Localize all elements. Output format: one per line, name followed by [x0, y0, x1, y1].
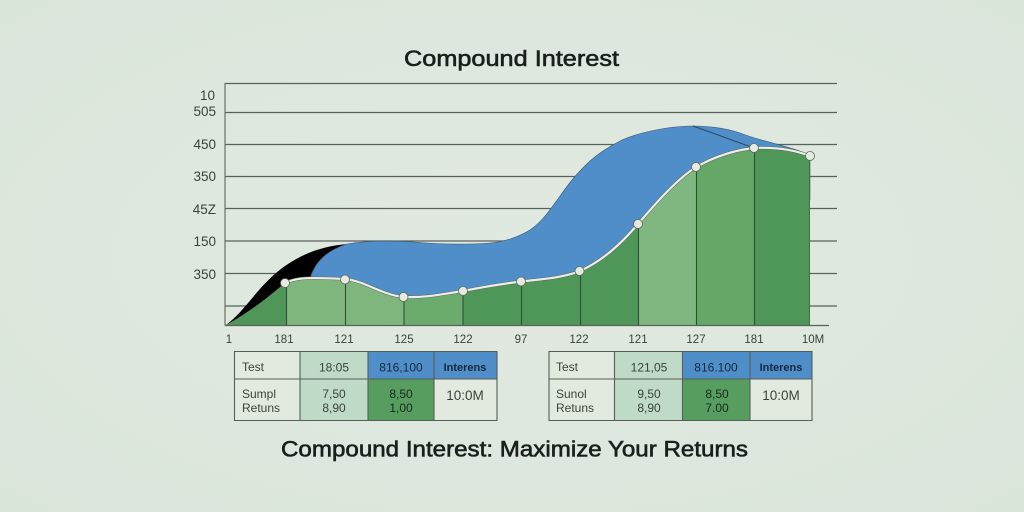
growth curve line: [285, 148, 810, 297]
left table: 10:0M: [446, 388, 484, 403]
x axis labels: 97: [515, 334, 527, 346]
x axis labels: 1: [226, 334, 232, 346]
x axis labels: 181: [744, 334, 764, 346]
right table: Retuns: [556, 401, 594, 415]
right table: 10:0M: [762, 388, 800, 403]
x axis labels: 181: [274, 334, 294, 346]
right table: Interens: [760, 362, 802, 374]
bottom heading: Compound Interest: Maximize Your Returns: [281, 436, 748, 462]
x axis labels: 125: [394, 334, 414, 346]
black area: [225, 244, 372, 326]
right table: Test: [556, 360, 579, 374]
x axis labels: 121: [334, 334, 354, 346]
x axis labels: 122: [569, 334, 589, 346]
right table: 816.100: [694, 360, 738, 374]
y axis labels: 350: [193, 169, 216, 184]
y axis labels: 45Z: [193, 202, 216, 217]
left table: 8,90: [322, 401, 346, 415]
left table: [234, 351, 497, 421]
baseline: [225, 324, 829, 326]
right table: [549, 351, 812, 421]
left table: 1,00: [389, 401, 413, 415]
x axis labels: 121: [628, 334, 648, 346]
right table: 121,05: [631, 360, 668, 374]
x axis labels: [226, 334, 824, 346]
x axis labels: 122: [453, 334, 473, 346]
data points: [280, 144, 814, 302]
right table: 8,90: [637, 401, 661, 415]
y axis labels: 505: [193, 104, 216, 119]
grid lines: [225, 83, 837, 326]
left table: 8,50: [389, 387, 413, 401]
left table: Test: [242, 360, 265, 374]
title: Compound Interest: [404, 46, 619, 71]
right table: Sunol: [556, 387, 587, 401]
blue area: [310, 126, 810, 310]
x axis labels: 10M: [802, 334, 824, 346]
right table: 8,50: [705, 387, 729, 401]
y axis labels: 350: [193, 267, 216, 282]
chart: compound interest area chart: [193, 83, 837, 346]
left table: 18:05: [319, 360, 349, 374]
y axis labels: 150: [193, 234, 216, 249]
left table: Interens: [444, 362, 486, 374]
y axis labels: 450: [193, 137, 216, 152]
y axis labels: 10: [200, 88, 215, 103]
blue area fold line: [693, 126, 754, 148]
x axis labels: 127: [686, 334, 706, 346]
y axis labels: [193, 88, 216, 282]
right table: 7.00: [705, 401, 729, 415]
left table: Sumpl: [242, 387, 276, 401]
left table: 7,50: [322, 387, 346, 401]
right table: 9,50: [637, 387, 661, 401]
left table: Retuns: [242, 401, 280, 415]
left table: 816,100: [379, 360, 423, 374]
green area bands: [225, 140, 810, 326]
